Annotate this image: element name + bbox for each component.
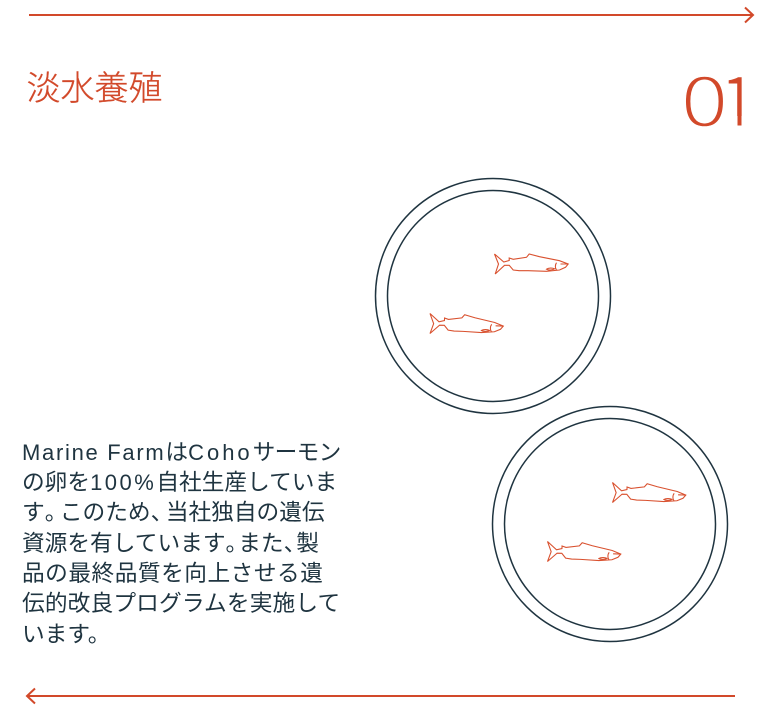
body text: 資源を有しています。また、製 (22, 530, 319, 556)
section number: 1 (720, 50, 756, 146)
body text: 品の最終品質を向上させる遺 (22, 560, 323, 586)
body text: の卵を100%自社生産していま (22, 469, 337, 495)
section number (681, 50, 760, 146)
fish: lower left (547, 542, 621, 564)
fish: lower right (612, 482, 686, 505)
body text: す。このため、当社独自の遺伝 (22, 499, 325, 525)
fish: upper right (494, 254, 568, 274)
body text: います。 (22, 621, 110, 647)
arrow: top pointing right (29, 8, 753, 22)
tank: upper (376, 178, 610, 414)
tank: lower (492, 406, 728, 642)
section number: 0 (681, 50, 728, 145)
arrow: bottom pointing left (27, 688, 735, 704)
body text: Marine FarmはCohoサーモン (22, 438, 341, 464)
fish: upper left (429, 314, 504, 336)
body text: 伝的改良プログラムを実施して (22, 590, 340, 616)
body text (22, 438, 341, 647)
title: 淡水養殖 (26, 60, 162, 110)
